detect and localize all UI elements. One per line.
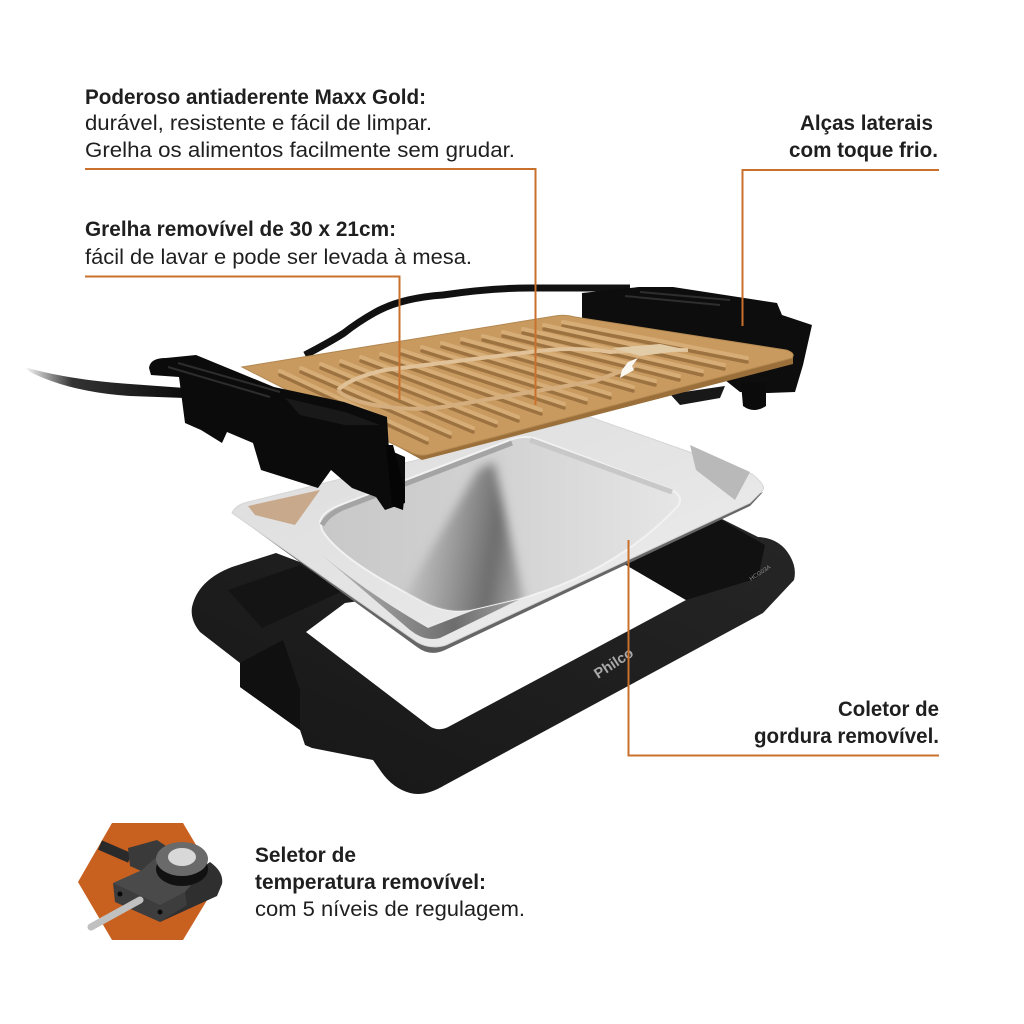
text: temperature selector [255,844,525,921]
model label: HCG03A [749,565,772,583]
text: temperature selector: Seletor de [255,844,356,867]
tray inner pan [320,437,680,611]
text: handles [789,112,938,162]
grill ribs [280,322,747,443]
text: drip tray: Coletor de [838,698,939,721]
raised oval channel [338,349,688,390]
logo: Philco: Philco [591,645,637,682]
callout line: Maxx Gold [85,169,536,405]
text: drip tray: gordura removível. [754,725,939,748]
right handle [582,287,812,410]
text: removable grill [85,218,472,269]
text: handles: Alças laterais [800,112,933,135]
text: Maxx Gold [85,86,515,162]
text: removable grill: Grelha removível de 30 x 21cm: [85,218,396,241]
gold non-stick grill plate [242,315,793,460]
base frame [192,517,795,794]
left handle [149,355,405,510]
callout line: handles [742,170,939,326]
text: temperature selector: temperatura removível: [255,871,486,894]
text: Maxx Gold: durável, resistente e fácil de limpar. [85,112,432,135]
power cord [24,288,630,398]
text: drip tray [754,698,939,748]
text: removable grill: fácil de lavar e pode ser levada à mesa. [85,246,472,269]
text: Maxx Gold: Grelha os alimentos facilmente sem grudar. [85,139,515,162]
callout line: removable grill [85,276,400,400]
callout line: drip tray [628,540,939,756]
text: Maxx Gold: Poderoso antiaderente Maxx Gold: [85,86,426,109]
text: temperature selector: com 5 níveis de regulagem. [255,898,525,921]
text: handles: com toque frio. [789,139,938,162]
icon: temperature selector on hexagon [78,823,222,940]
removable drip tray [232,417,764,653]
